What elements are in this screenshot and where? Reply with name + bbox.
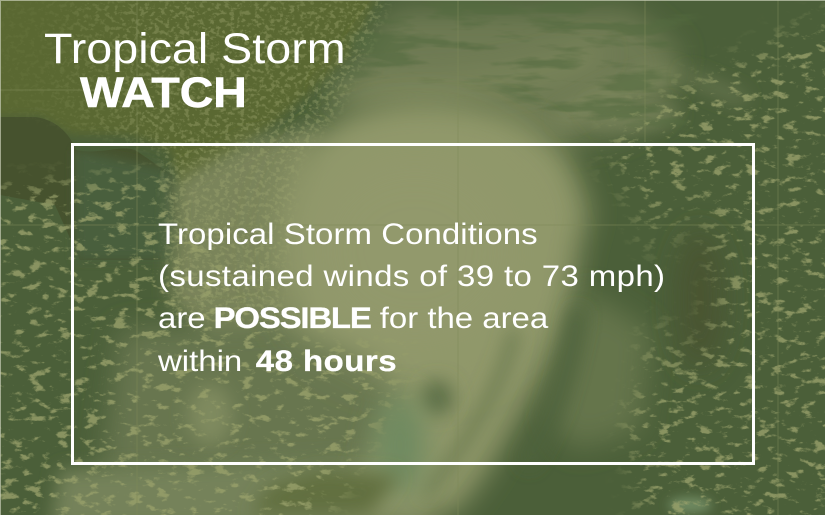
upper bands (340, 10, 680, 145)
dark rainbands (425, 330, 515, 495)
dark east ocean (676, 230, 724, 370)
land (0, 0, 385, 190)
definition text: are POSSIBLE for the area (158, 302, 548, 335)
definition text: Tropical Storm Conditions (158, 218, 538, 251)
title (44, 25, 346, 117)
main cloud mass (284, 102, 590, 515)
olive land bottom (250, 470, 400, 515)
gulf (0, 117, 178, 260)
haze east of eyewall (550, 290, 650, 450)
teal shallows (374, 395, 426, 495)
definition text (158, 218, 665, 378)
title line: WATCH: WATCH (80, 69, 247, 117)
panel: definition box (71, 143, 755, 465)
definition text: within 48 hours (158, 345, 397, 378)
coastal clouds (170, 130, 320, 350)
title line: Tropical Storm: Tropical Storm (44, 25, 346, 73)
dark streaks in upper bands (359, 15, 666, 125)
definition text: (sustained winds of 39 to 73 mph) (158, 260, 665, 293)
